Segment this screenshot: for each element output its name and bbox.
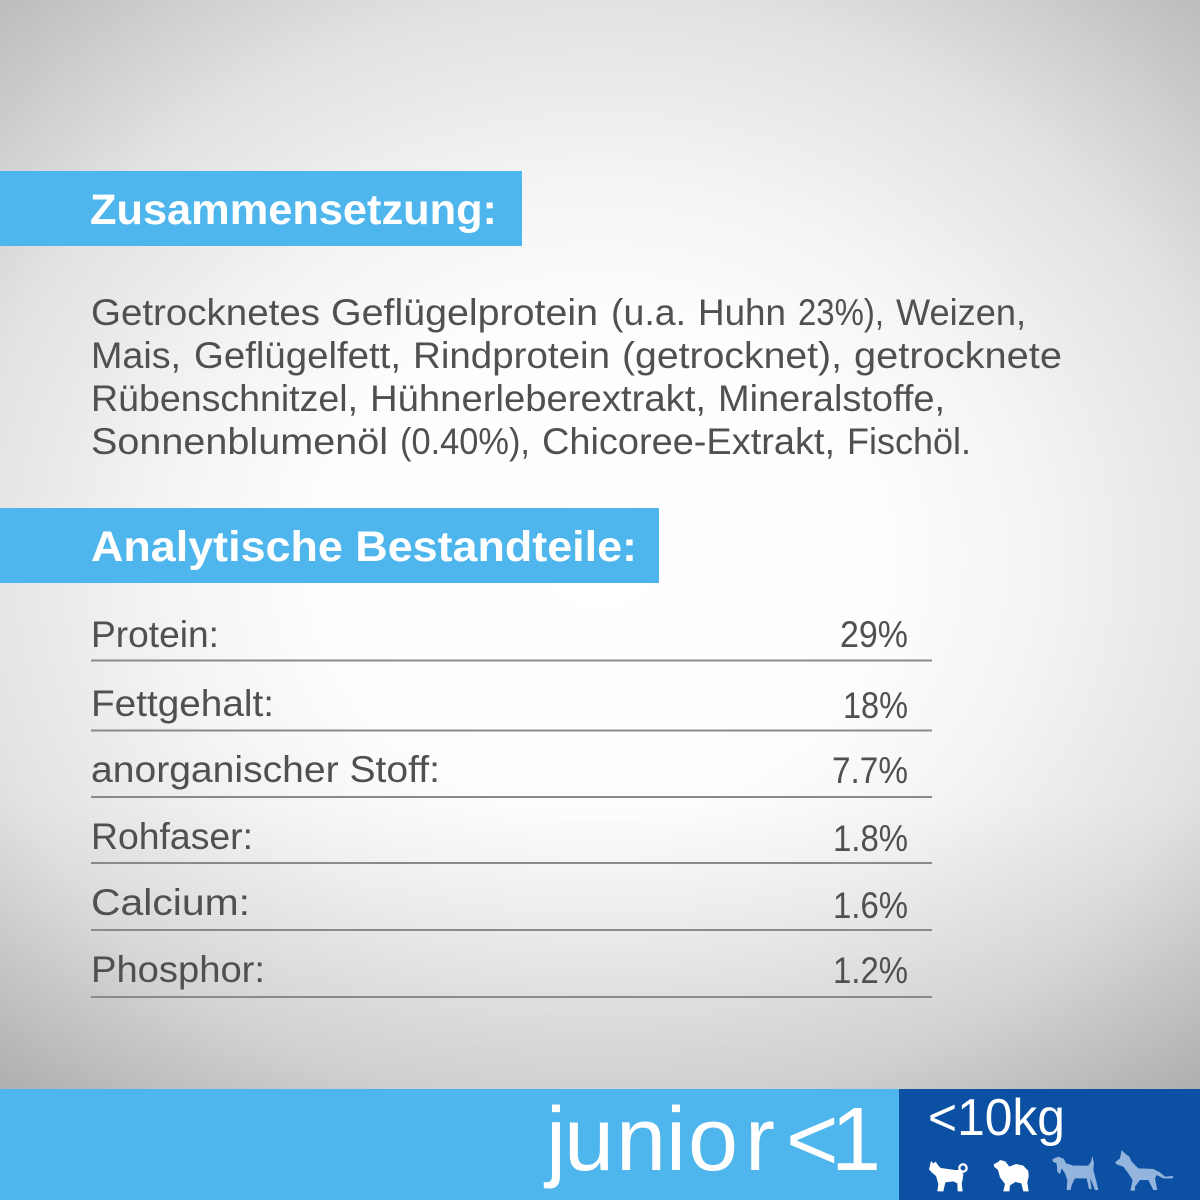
row: fat: 18% bbox=[843, 685, 908, 726]
text block: ingredients: Hühnerleberextrakt, bbox=[370, 378, 706, 419]
panel: Zusammensetzung heading: Zusammensetzung: bbox=[90, 186, 497, 234]
row: crude fibre: Rohfaser: bbox=[91, 816, 253, 857]
row: calcium bbox=[91, 882, 932, 931]
icon: small spitz dog, active bbox=[929, 1161, 967, 1191]
text block: ingredients: Mineralstoffe, bbox=[718, 378, 945, 419]
text block: ingredients: Rübenschnitzel, bbox=[91, 378, 358, 419]
row: inorganic matter: anorganischer Stoff: bbox=[91, 749, 440, 790]
text block: ingredients: Geflügelfett, bbox=[194, 335, 401, 376]
footer band: junior age: junior <1 bbox=[543, 1090, 881, 1190]
footer panel: weight class bbox=[899, 1089, 1200, 1200]
icon: fluffy spitz dog, active bbox=[994, 1160, 1029, 1191]
text block: ingredients: Sonnenblumenöl bbox=[91, 421, 388, 462]
row: protein bbox=[91, 614, 932, 662]
icon: shepherd dog, inactive bbox=[1115, 1150, 1173, 1191]
text block: ingredients: Geflügelprotein bbox=[331, 292, 598, 333]
text block: ingredients: getrocknete bbox=[854, 335, 1062, 376]
row: inorganic matter: 7.7% bbox=[832, 750, 908, 791]
text block: ingredients: (getrocknet), bbox=[622, 335, 842, 376]
row: inorganic matter bbox=[91, 749, 932, 798]
row: fat bbox=[91, 683, 932, 732]
text block: ingredients: 23%), bbox=[798, 292, 884, 333]
row: fat: Fettgehalt: bbox=[91, 683, 274, 724]
footer band: junior age bbox=[0, 1089, 899, 1200]
text block: ingredients: (0.40%), bbox=[400, 421, 530, 462]
row: phosphorus bbox=[91, 949, 932, 998]
row: calcium: Calcium: bbox=[91, 882, 250, 923]
text block: ingredients: Weizen, bbox=[896, 292, 1026, 333]
row: phosphorus: Phosphor: bbox=[91, 949, 265, 990]
row: crude fibre bbox=[91, 816, 932, 864]
text block: ingredients: Mais, bbox=[91, 335, 181, 376]
panel: Analytische Bestandteile heading: Analytische Bestandteile: bbox=[91, 523, 637, 571]
icon: beagle dog, inactive bbox=[1053, 1156, 1098, 1190]
text block: ingredients: Fischöl. bbox=[847, 421, 971, 462]
text block: ingredients: (u.a. bbox=[611, 292, 686, 333]
row: phosphorus: 1.2% bbox=[833, 950, 908, 991]
text block: ingredients: Chicoree-Extrakt, bbox=[542, 421, 835, 462]
row: protein: Protein: bbox=[91, 614, 219, 655]
table: analytical constituents bbox=[91, 614, 932, 998]
panel: Zusammensetzung heading bbox=[0, 171, 522, 246]
text block: ingredients: Getrocknetes bbox=[91, 292, 320, 333]
footer panel: weight class: <10kg bbox=[928, 1089, 1065, 1147]
row: crude fibre: 1.8% bbox=[833, 818, 908, 859]
panel: Analytische Bestandteile heading bbox=[0, 508, 659, 583]
row: protein: 29% bbox=[840, 614, 908, 655]
text block: ingredients: Rindprotein bbox=[413, 335, 610, 376]
row: calcium: 1.6% bbox=[833, 885, 908, 926]
text block: ingredients bbox=[91, 292, 1062, 462]
text block: ingredients: Huhn bbox=[698, 292, 786, 333]
